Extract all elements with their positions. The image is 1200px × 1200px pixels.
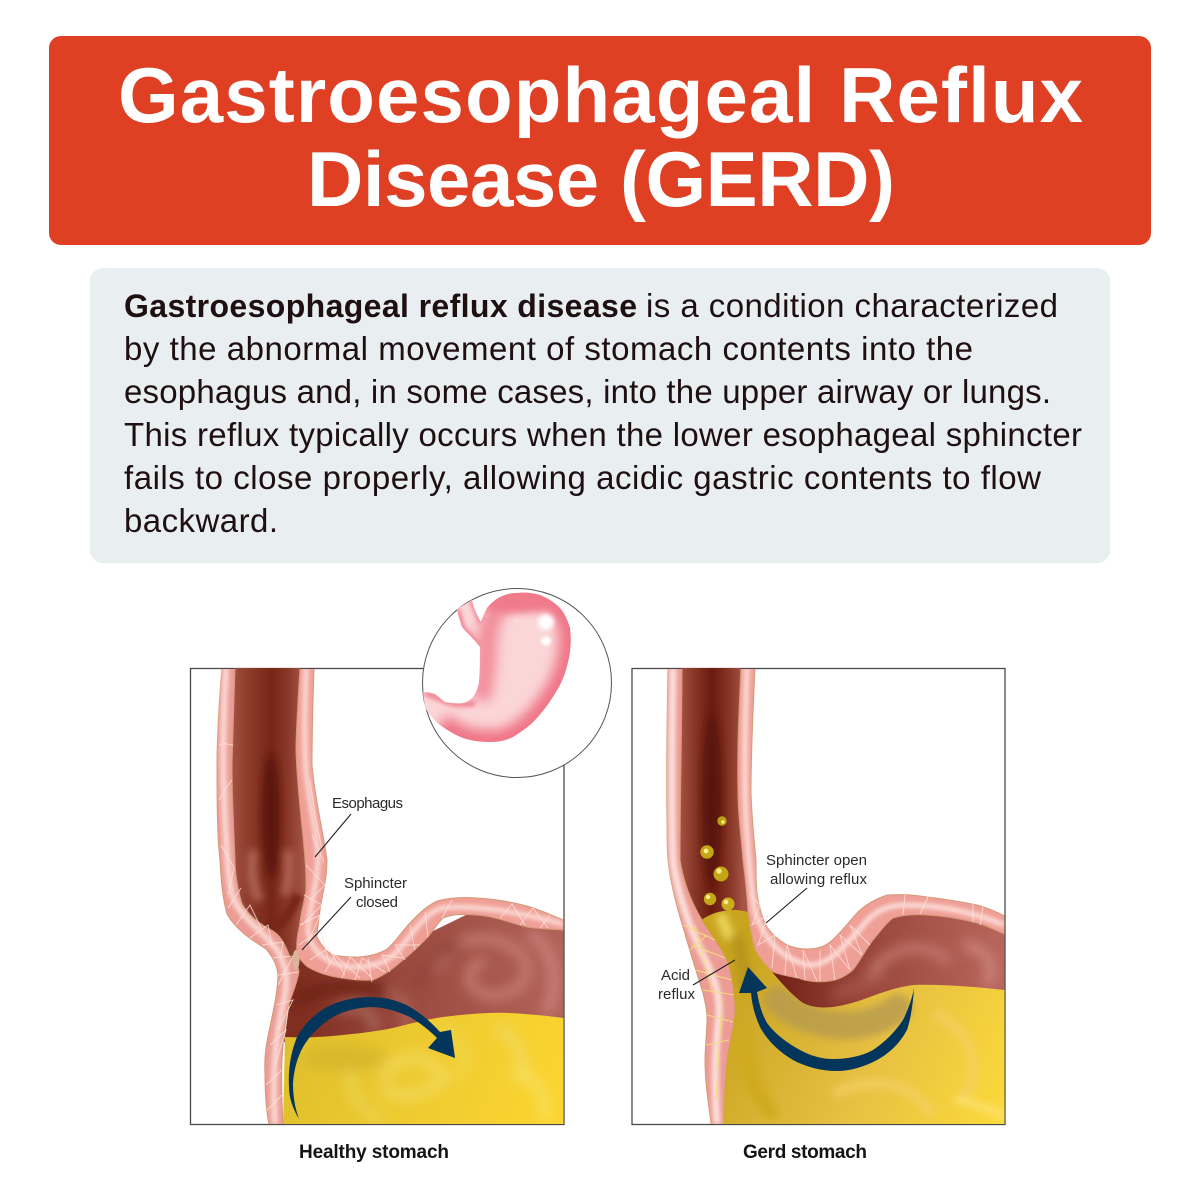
icon: stomach (423, 593, 571, 742)
panel: gerd stomach diagram (632, 668, 1005, 1163)
title: Disease (GERD) (307, 135, 895, 223)
stomach acid (283, 1013, 564, 1124)
icon: acid bubbles (700, 816, 734, 910)
definition text: backward. (124, 502, 278, 539)
label: acid reflux: reflux (658, 986, 696, 1003)
label: sphincter open allowing reflux: Sphincter open (766, 852, 867, 869)
title: Gastroesophageal Reflux (118, 51, 1083, 139)
definition text: esophagus and, in some cases, into the upper airway or lungs. (124, 373, 1051, 410)
stomach cavity (750, 910, 1004, 1020)
esophagus lumen (232, 668, 306, 962)
definition text (124, 287, 1082, 539)
stomach acid and reflux (700, 910, 1004, 1124)
panel: definition (90, 268, 1110, 563)
label: sphincter closed: Sphincter (344, 875, 407, 892)
esophagus wall left (217, 668, 299, 1124)
label: acid reflux: Acid (661, 967, 690, 984)
label: sphincter closed: closed (356, 894, 398, 911)
panel: healthy stomach diagram (190, 668, 564, 1163)
label line: acid reflux (693, 960, 735, 985)
arrow: reflux motion (739, 967, 914, 1071)
label: sphincter open allowing reflux: allowing reflux (770, 871, 868, 888)
esophagus lumen (680, 668, 749, 925)
definition text: fails to close properly, allowing acidic gastric contents to flow (124, 459, 1041, 496)
title banner (49, 36, 1151, 245)
label line: sphincter open (766, 888, 807, 923)
inset: stomach in circle (422, 588, 612, 778)
esophagus wall right and stomach wall (296, 668, 564, 982)
definition text: Gastroesophageal reflux disease (124, 288, 637, 324)
esophagus wall right and stomach wall (738, 668, 1004, 982)
arrow: stomach motion (289, 997, 455, 1119)
caption: healthy stomach: Healthy stomach (299, 1142, 449, 1163)
caption: gerd stomach: Gerd stomach (743, 1142, 867, 1163)
definition text: by the abnormal movement of stomach contents into the (124, 330, 973, 367)
stomach cavity (284, 910, 564, 1042)
label line: esophagus (315, 814, 351, 857)
sphincter junction (292, 950, 300, 970)
esophagus wall left (667, 668, 735, 1124)
label: esophagus: Esophagus (332, 795, 403, 812)
definition text: is a condition characterized (646, 287, 1058, 324)
definition text: This reflux typically occurs when the lower esophageal sphincter (124, 416, 1082, 453)
label line: sphincter (302, 897, 351, 950)
